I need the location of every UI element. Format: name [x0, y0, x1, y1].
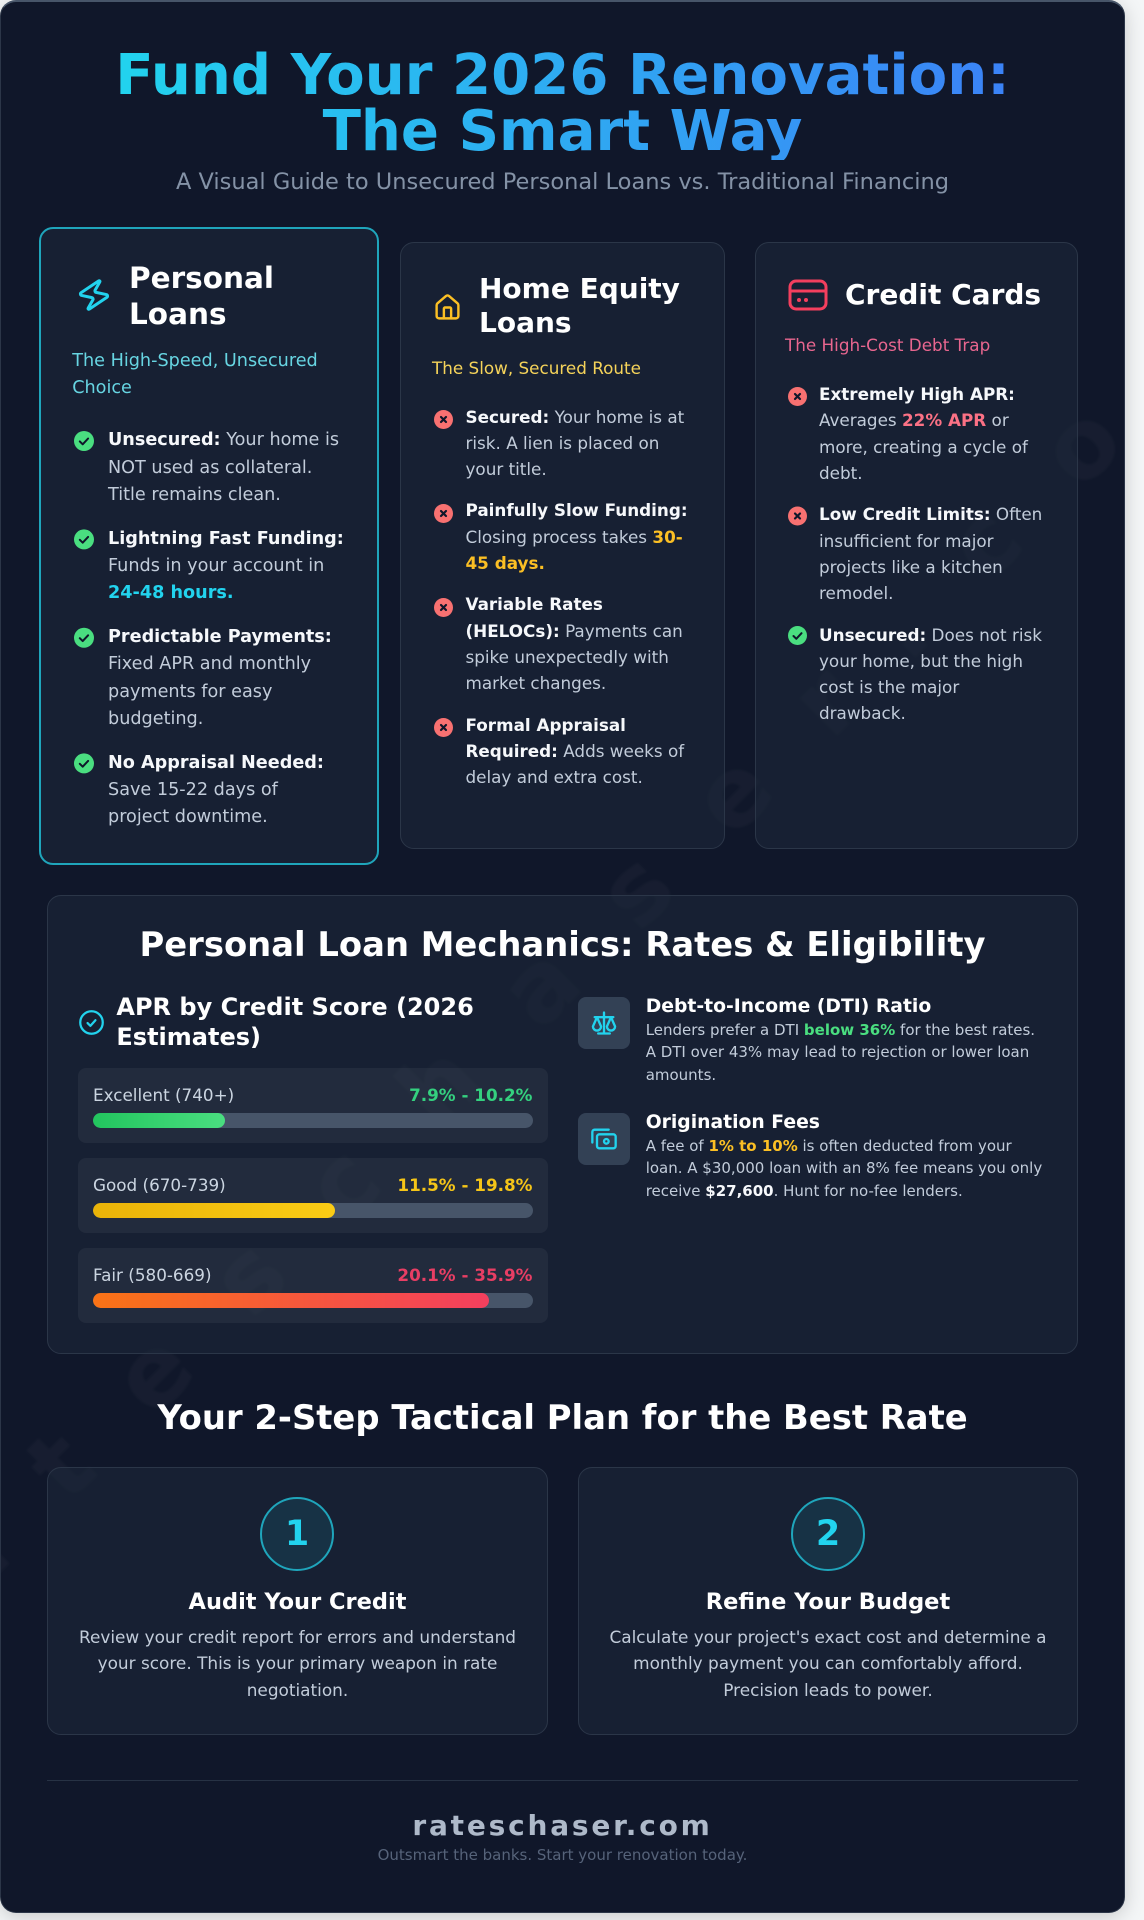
tagline: The High-Speed, Unsecured: [72, 351, 318, 371]
title: The Smart Way: [323, 99, 802, 164]
apr heading: Estimates): [116, 1023, 261, 1051]
step 2 text: Precision leads to power.: [723, 1680, 933, 1700]
bar row: excellent: 7.9% - 10.2%: [409, 1085, 532, 1105]
heading: home equity: Loans: [479, 306, 572, 339]
heading: personal loans: Personal: [129, 261, 274, 295]
panel: step 2: [578, 1466, 1078, 1734]
mixed list: projects like a kitchen: [819, 557, 1003, 577]
cross list: Formal Appraisal: [466, 715, 626, 735]
icons: status: [788, 387, 807, 645]
check list: Funds in your account in: [108, 556, 324, 576]
fees text: loan. A $30,000 loan with an 8% fee means you only: [646, 1159, 1042, 1177]
cross list: market changes.: [466, 673, 606, 693]
personal loans content: [72, 261, 344, 827]
check list: Predictable Payments:: [108, 627, 332, 647]
fees text: [646, 1137, 1042, 1200]
tagline: [72, 351, 318, 398]
heading: home equity: [479, 272, 680, 339]
check list: payments for easy: [108, 682, 272, 702]
check list: 24-48 hours.: [108, 583, 234, 603]
check list: project downtime.: [108, 807, 268, 827]
check list: Lightning Fast Funding:: [108, 529, 344, 549]
apr heading: APR by Credit Score (2026: [116, 993, 474, 1021]
dti text: A DTI over 43% may lead to rejection or lower loan: [646, 1043, 1029, 1061]
check list: [108, 430, 344, 827]
heading: credit cards: Credit Cards: [845, 278, 1041, 310]
bar row: fair: 20.1% - 35.9%: [397, 1265, 532, 1285]
home equity content: [74, 272, 688, 787]
step 1 text: Review your credit report for errors and understand: [79, 1627, 516, 1647]
step 1 text: your score. This is your primary weapon in rate: [98, 1653, 497, 1673]
dti title: Debt-to-Income (DTI) Ratio: [646, 996, 931, 1016]
bar row: fair: [78, 1248, 548, 1323]
footer tagline: Outsmart the banks. Start your renovation today.: [378, 1846, 747, 1864]
cross list: [466, 407, 688, 787]
cross list: (HELOCs): Payments can: [466, 621, 683, 641]
title: Fund Your 2026 Renovation:: [115, 43, 1010, 108]
icons: crosses: [434, 410, 453, 737]
step 1 title: Audit Your Credit: [189, 1589, 406, 1615]
step 2 text: monthly payment you can comfortably afford.: [633, 1653, 1023, 1673]
icon: credit card: [788, 280, 828, 310]
heading: personal loans: Loans: [129, 297, 227, 331]
step 1 text: [79, 1627, 516, 1700]
icons: checks: [74, 431, 94, 774]
panel: credit cards: [754, 242, 1078, 849]
check list: NOT used as collateral.: [108, 458, 312, 478]
mixed list: [819, 384, 1042, 723]
mechanics heading: Personal Loan Mechanics: Rates & Eligibility: [139, 925, 986, 964]
step 1 number: [260, 1497, 334, 1571]
fees text: A fee of 1% to 10% is often deducted from your: [646, 1137, 1012, 1155]
cross list: Variable Rates: [466, 594, 603, 614]
check list: Save 15-22 days of: [108, 780, 278, 800]
cross list: your title.: [466, 459, 547, 479]
icon box: scale: [578, 997, 630, 1049]
check list: budgeting.: [108, 709, 203, 729]
step 2 title: Refine Your Budget: [706, 1589, 950, 1615]
cross list: spike unexpectedly with: [466, 647, 669, 667]
dti text: amounts.: [646, 1066, 716, 1084]
cross list: delay and extra cost.: [466, 767, 643, 787]
step 1 text: negotiation.: [247, 1680, 348, 1700]
icon: house: [435, 294, 460, 320]
icon: lightning: [78, 279, 110, 311]
step 2 text: [609, 1627, 1047, 1700]
panel: personal loans: [39, 227, 379, 865]
mixed list: more, creating a cycle of: [819, 437, 1028, 457]
mixed list: drawback.: [819, 703, 906, 723]
mixed list: Extremely High APR:: [819, 384, 1015, 404]
check list: Title remains clean.: [108, 485, 281, 505]
bar row: good: Good (670-739): [93, 1175, 226, 1195]
title: [115, 48, 1010, 160]
check list: Unsecured: Your home is: [108, 430, 339, 450]
fees title: Origination Fees: [646, 1112, 820, 1132]
footer site name: rateschaser.com: [412, 1809, 713, 1842]
credit cards content: [74, 278, 1042, 767]
mixed list: your home, but the high: [819, 651, 1023, 671]
mixed list: Low Credit Limits: Often: [819, 504, 1042, 524]
mixed list: debt.: [819, 463, 863, 483]
fees text: receive $27,600. Hunt for no-fee lenders.: [646, 1182, 963, 1200]
mixed list: Averages 22% APR or: [819, 410, 1009, 430]
panel: step 1: [47, 1466, 548, 1734]
cross list: risk. A lien is placed on: [466, 433, 659, 453]
heading: personal loans: [129, 261, 274, 331]
check list: Fixed APR and monthly: [108, 654, 311, 674]
bar row: fair: Fair (580-669): [93, 1265, 212, 1285]
bar row: excellent: [78, 1068, 548, 1143]
mixed list: Unsecured: Does not risk: [819, 625, 1042, 645]
cross list: Secured: Your home is at: [466, 407, 684, 427]
tagline: The Slow, Secured Route: [432, 358, 641, 378]
step 2 number: 2: [816, 1514, 840, 1554]
cross list: Closing process takes 30-: [466, 527, 683, 547]
icon: circle check: [79, 1010, 104, 1035]
icon box: banknote: [578, 1113, 630, 1165]
dti text: [646, 1021, 1035, 1084]
heading: home equity: Home Equity: [479, 272, 680, 305]
panel: mechanics: [47, 894, 1078, 1354]
tagline: Choice: [72, 378, 132, 398]
step 2 number: [791, 1497, 865, 1571]
cross list: Painfully Slow Funding:: [466, 500, 688, 520]
check list: No Appraisal Needed:: [108, 753, 324, 773]
step 1 number: 1: [285, 1514, 309, 1554]
apr heading: [116, 993, 474, 1051]
mixed list: insufficient for major: [819, 531, 994, 551]
bar row: good: [78, 1158, 548, 1233]
dti text: Lenders prefer a DTI below 36% for the best rates.: [646, 1021, 1035, 1039]
step 2 text: Calculate your project's exact cost and determine a: [609, 1627, 1047, 1647]
cross list: Required: Adds weeks of: [466, 741, 684, 761]
subtitle: A Visual Guide to Unsecured Personal Loans vs. Traditional Financing: [176, 169, 949, 195]
panel: home equity loans: [400, 242, 724, 849]
mixed list: remodel.: [819, 583, 893, 603]
bar row: excellent: Excellent (740+): [93, 1085, 234, 1105]
bar row: good: 11.5% - 19.8%: [397, 1175, 532, 1195]
tagline: The High-Cost Debt Trap: [785, 335, 990, 355]
cross list: 45 days.: [466, 553, 545, 573]
plan heading: Your 2-Step Tactical Plan for the Best Rate: [157, 1398, 968, 1437]
mixed list: cost is the major: [819, 677, 959, 697]
